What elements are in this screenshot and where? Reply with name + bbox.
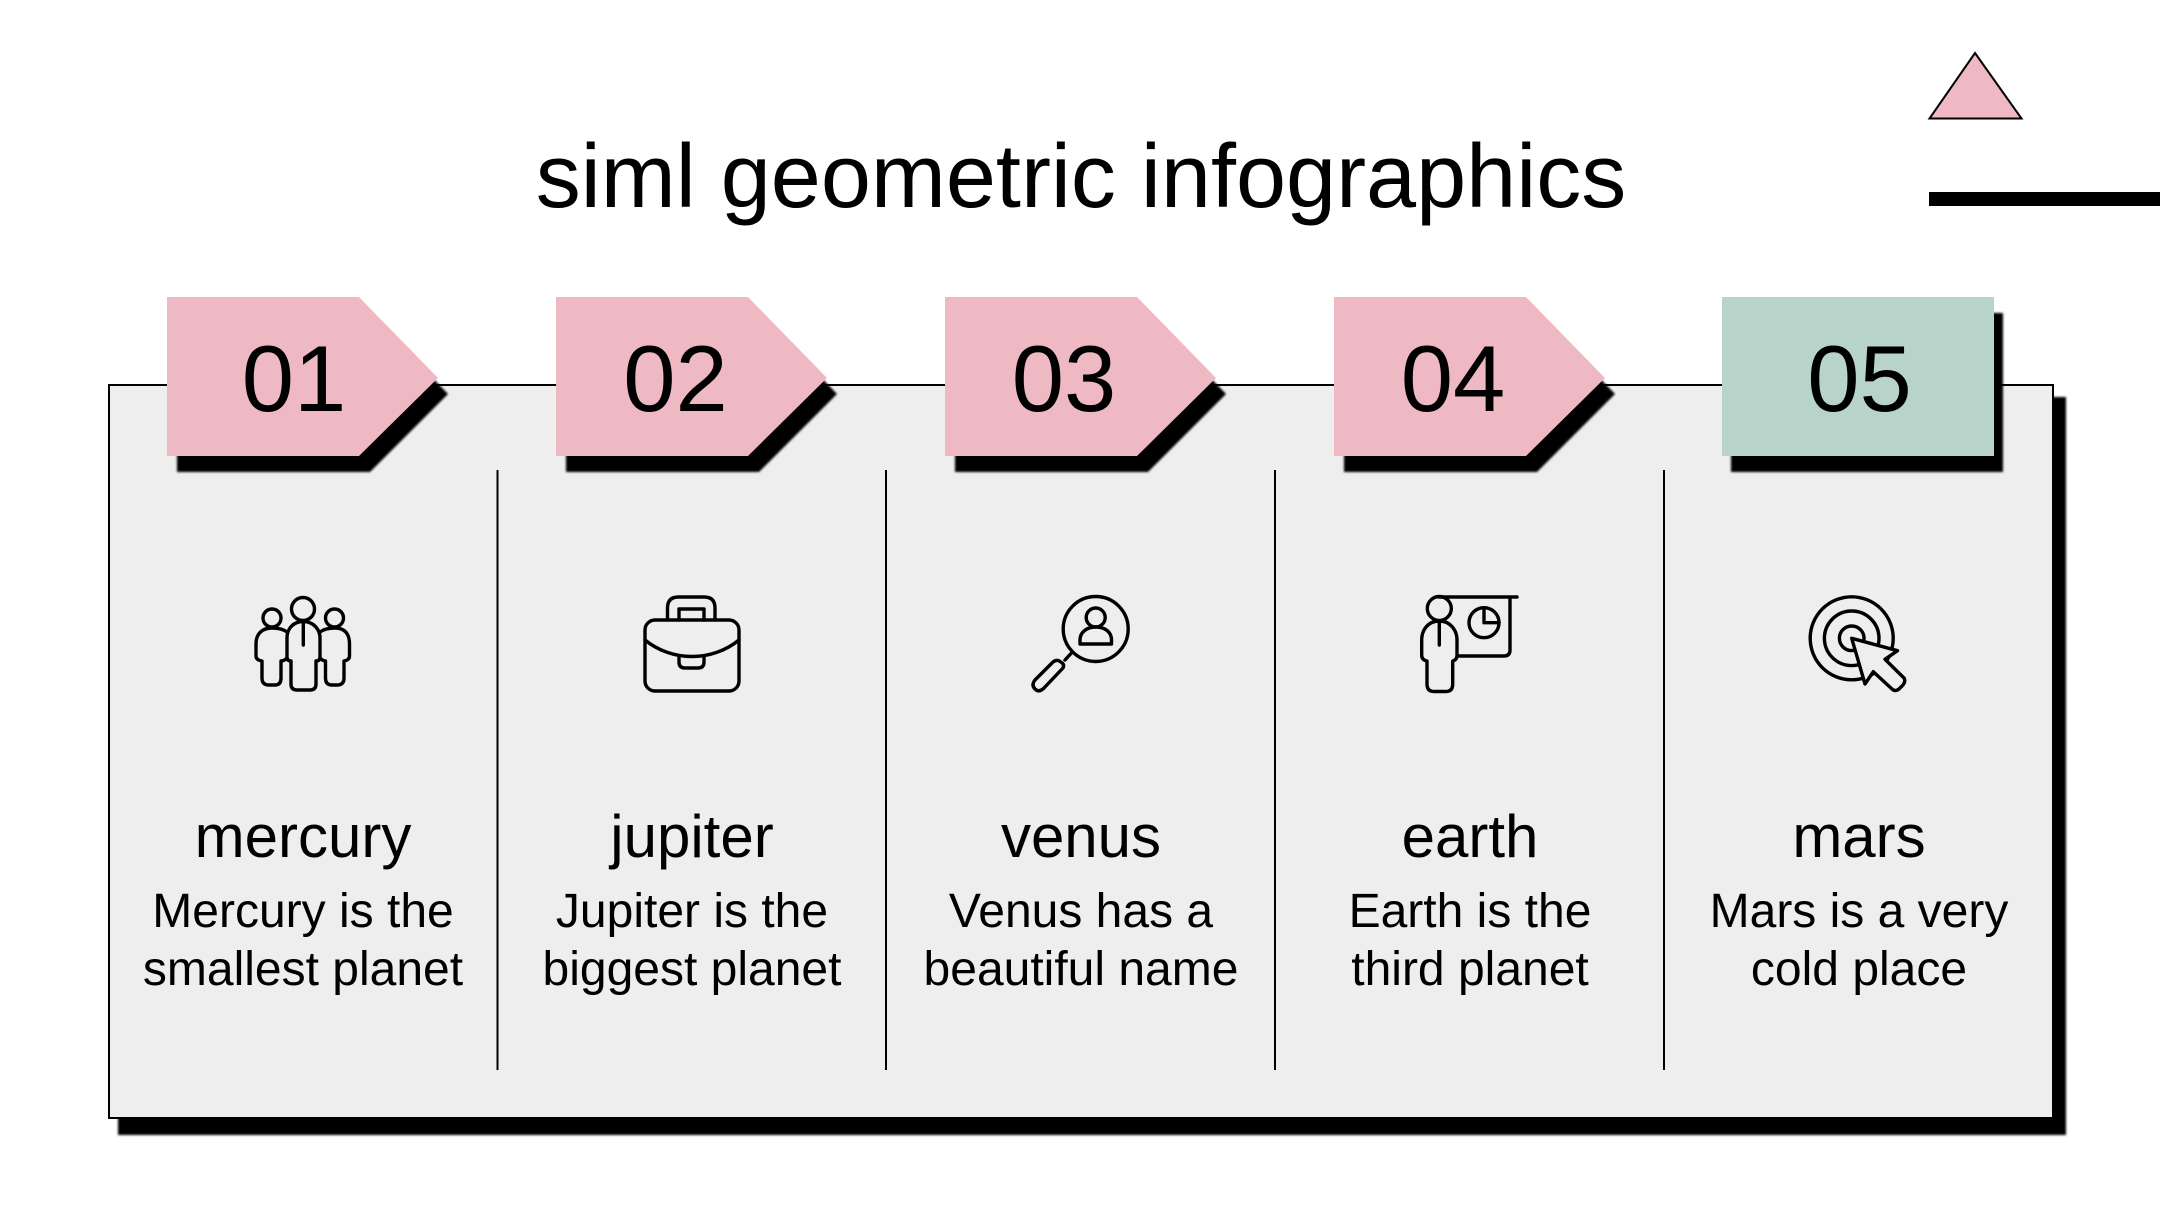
description: mars: Mars is a very: [1710, 885, 2008, 938]
heading: jupiter: jupiter: [608, 803, 774, 870]
column 4: earth: [1334, 297, 1615, 996]
number tag 02: [556, 297, 837, 472]
column 2: jupiter: [543, 297, 841, 996]
heading: mercury: mercury: [195, 803, 411, 870]
icon: briefcase: [645, 597, 739, 691]
decorative triangle: [1930, 53, 2022, 118]
number tag 04: [1334, 297, 1615, 472]
description: venus: Venus has a: [949, 885, 1213, 938]
number tag 02: 02: [623, 326, 728, 431]
title: siml geometric infographics: [536, 127, 1626, 227]
panel background: [109, 385, 2053, 1118]
heading: venus: venus: [1001, 803, 1161, 870]
description: venus: beautiful name: [924, 943, 1238, 996]
column 5: mars: [1710, 297, 2008, 996]
number tag 04: 04: [1401, 326, 1505, 431]
number tag 05: [1722, 297, 2003, 472]
number tag 01: [167, 297, 448, 472]
description: mars: cold place: [1751, 943, 1967, 996]
column 3: venus: [924, 297, 1238, 996]
number tag 01: 01: [242, 326, 346, 431]
description: earth: Earth is the: [1349, 885, 1591, 938]
heading: mars: mars: [1792, 803, 1926, 870]
column 1: mercury: [143, 297, 463, 996]
number tag 03: 03: [1012, 326, 1116, 431]
icon: magnifier with person: [1033, 596, 1128, 691]
heading: earth: earth: [1402, 803, 1538, 870]
icon: presenter with chart board: [1422, 596, 1517, 692]
description: mercury: Mercury is the: [152, 885, 454, 938]
description: mercury: smallest planet: [143, 943, 463, 996]
main panel: [109, 385, 2066, 1135]
number tag 03: [945, 297, 1226, 472]
description: earth: third planet: [1351, 943, 1589, 996]
icon: target with cursor: [1810, 597, 1905, 690]
icon: team of people: [256, 598, 350, 690]
panel shadow: [118, 397, 2066, 1135]
description: jupiter: Jupiter is the: [556, 885, 828, 938]
number tag 05: 05: [1807, 326, 1912, 431]
column dividers: [498, 470, 1664, 1070]
description: jupiter: biggest planet: [543, 943, 841, 996]
decorative bar: [1929, 192, 2160, 206]
